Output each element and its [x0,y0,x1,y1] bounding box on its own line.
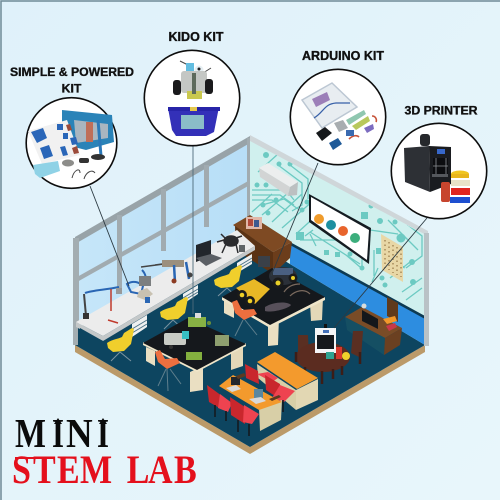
heading: 3d printer: 3D PRINTER [404,104,478,118]
printer [404,134,451,192]
long wall desk [76,230,255,360]
robot models on desk [127,260,192,303]
kit contents [168,61,220,136]
kit circle [26,98,117,188]
callout: 3D Printer [391,104,487,219]
kit contents [302,83,376,150]
yellow robot car [236,279,270,306]
black robot cars [258,256,310,312]
cabinet [233,215,292,274]
floor [75,240,425,447]
robot arm [83,287,122,323]
printer circle [391,123,487,219]
title [12,411,197,493]
heading: simple and powered kit: SIMPLE & POWERED [10,65,134,79]
wall screen [309,194,371,264]
floor base [75,345,425,454]
icon: air conditioner [259,163,298,196]
red chairs behind desk [245,364,295,412]
pegboard [381,234,403,282]
blue wainscot band [290,243,425,345]
leader lines [90,146,427,328]
table with dark top and kits [143,313,246,392]
desk drawers [132,254,252,337]
kit contents [28,110,114,179]
heading: kit: KIT [62,82,82,96]
orange table [257,352,318,410]
classroom room illustration [73,135,429,454]
title line: mini: N [66,411,93,456]
teacher desk [345,297,402,355]
callout: Kido Kit [144,30,240,146]
spider robot [217,234,245,253]
callout: Arduino Kit [290,49,386,165]
kit models on table [164,313,229,360]
left glass wall [73,136,252,345]
kit circle [290,69,386,165]
title line: stem lab: STEMLAB [12,449,197,493]
cabinet top models [246,217,262,229]
title line: mini: M [15,412,46,457]
title line: mini [15,411,109,457]
title line: mini: I [97,411,109,456]
red chairs in front of desk [207,385,259,436]
table with robot cars [222,256,325,346]
title line: mini: I [52,411,64,456]
orange chairs [155,300,257,391]
heading: arduino kit: ARDUINO KIT [302,49,384,63]
round table with 3D printer [296,324,363,384]
wall top edge [250,135,428,236]
heading: kido kit: KIDO KIT [168,30,224,44]
laptop [196,240,222,266]
kit circle [144,50,240,146]
filament spools [441,170,470,203]
small 3D printer [315,324,336,353]
yellow chairs [107,265,242,361]
right circuit wall [250,135,429,346]
orange desk with laptops [219,373,282,431]
callout: Simple & Powered Kit [10,65,134,188]
